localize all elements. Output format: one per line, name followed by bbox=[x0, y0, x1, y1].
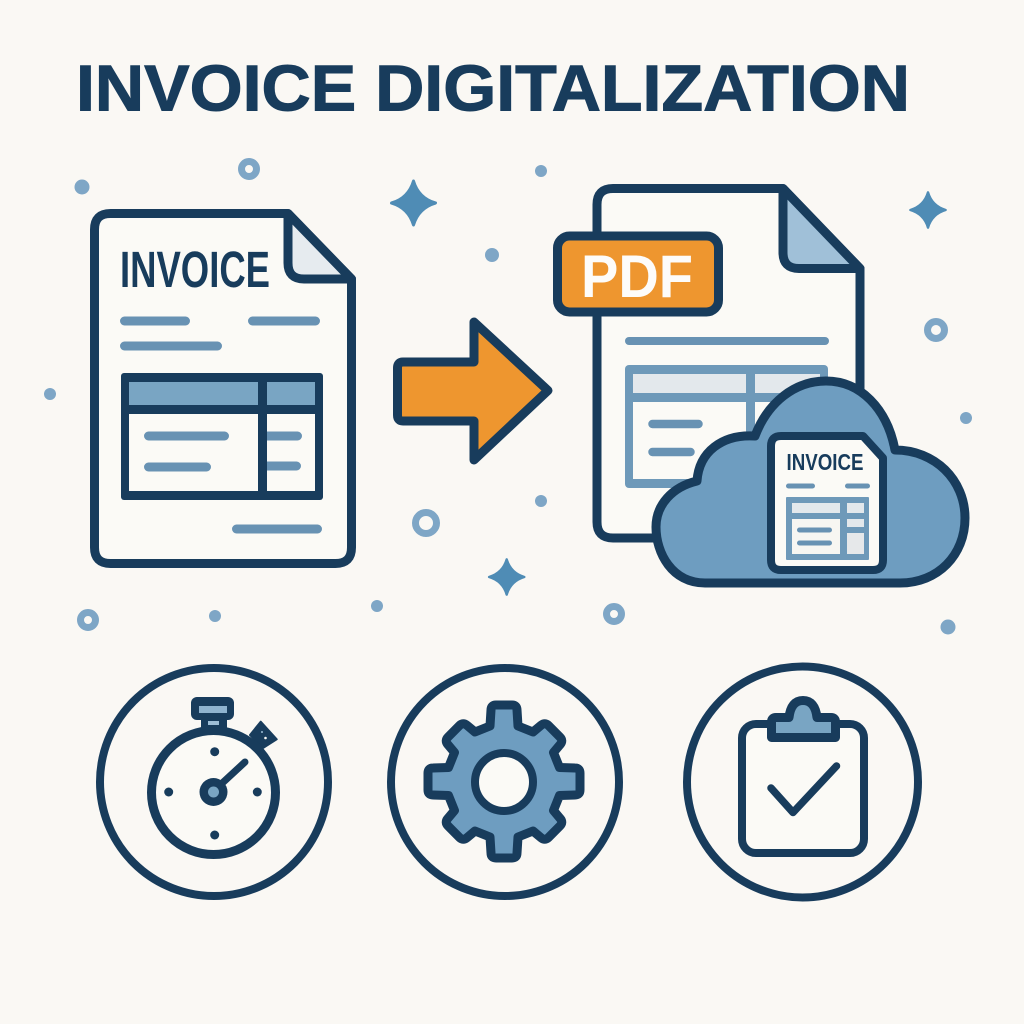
icon: stopwatch bbox=[100, 668, 328, 896]
invoice heading: INVOICE bbox=[120, 241, 270, 298]
invoice table bbox=[121, 373, 323, 500]
text line bbox=[629, 337, 825, 345]
cloud bbox=[656, 381, 965, 583]
invoice document bbox=[94, 214, 352, 564]
folded corner bbox=[288, 214, 352, 279]
cloud invoice bbox=[771, 436, 883, 570]
pdf table bbox=[625, 365, 828, 488]
pdf badge: PDF bbox=[581, 243, 693, 310]
pdf badge bbox=[558, 236, 718, 312]
cloud invoice: INVOICE bbox=[786, 449, 864, 475]
folded corner bbox=[783, 188, 860, 268]
text lines bbox=[124, 321, 318, 529]
icon: clipboard bbox=[687, 666, 918, 898]
title: INVOICE DIGITALIZATION bbox=[76, 52, 910, 124]
pdf document bbox=[597, 188, 860, 538]
arrow bbox=[398, 322, 548, 460]
icon: gear bbox=[391, 668, 619, 896]
decorative dots and sparkles bbox=[44, 162, 972, 634]
